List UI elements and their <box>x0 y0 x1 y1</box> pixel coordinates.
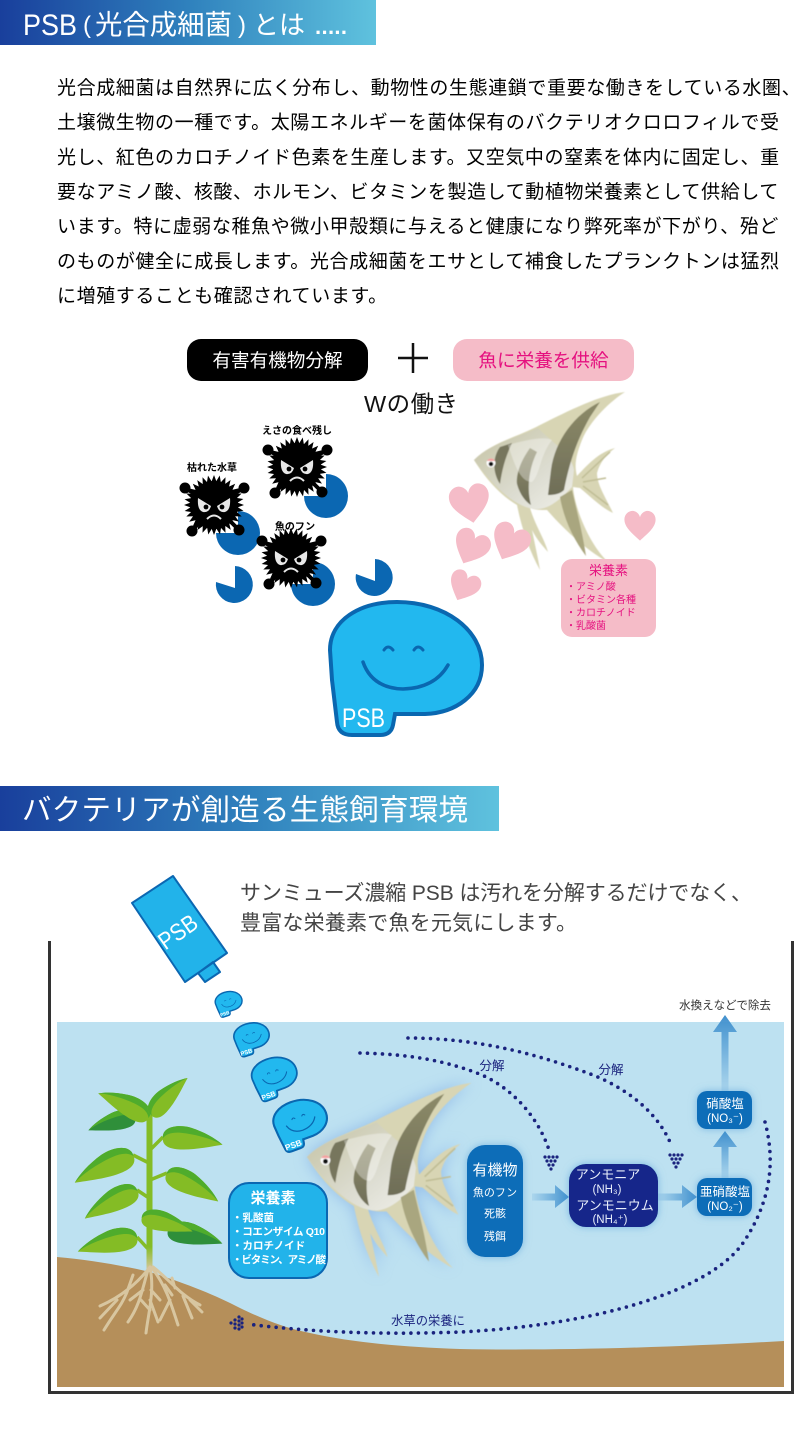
plant roots <box>100 1267 202 1333</box>
dotted arrow: decomposition to ammonia 1 <box>360 1053 559 1171</box>
pacman eating germ: 枯れた水草 <box>179 461 260 555</box>
panel: blue nutrients box: ・カロチノイド <box>232 1240 305 1252</box>
small PSB bacterium 2: PSB <box>240 1048 254 1058</box>
panel: aquarium water <box>57 1022 784 1387</box>
heading: バクテリアが創造る生態飼育環境 <box>0 786 499 831</box>
icon: PSB bottle: PSB <box>153 909 203 956</box>
illustration: angelfish in tank <box>307 1083 472 1277</box>
small PSB bacterium 4 <box>268 1092 334 1154</box>
heading: PSB とは: ( <box>83 12 91 39</box>
panel: pink nutrients box: ・ビタミン各種 <box>566 593 636 606</box>
heading: Wの働き: Wの働き <box>364 391 458 417</box>
panel: pink nutrients box: 栄養素 <box>589 563 628 578</box>
pacman eating germ: 魚のフン <box>256 520 335 606</box>
pacman eating germ: えさの食べ残し <box>262 424 348 518</box>
character: PSB smiling bacterium <box>330 602 482 735</box>
node: 有機物: 残餌 <box>484 1229 506 1243</box>
small PSB bacterium 4: PSB <box>284 1137 303 1153</box>
small PSB bacterium 1 <box>213 988 245 1018</box>
label: 分解 left: 分解 <box>479 1059 505 1073</box>
heading: PSB とは: 光合成細菌 <box>95 9 232 40</box>
node: アンモニア <box>569 1164 658 1227</box>
panel: blue nutrients box <box>229 1183 327 1278</box>
small PSB bacterium 1: PSB <box>220 1010 231 1018</box>
label: 水草の栄養に: 水草の栄養に <box>391 1313 465 1328</box>
node: 硝酸塩 <box>697 1091 752 1129</box>
node: 亜硝酸塩: (NO₂⁻) <box>707 1201 743 1213</box>
heading: PSB とは: ..... <box>315 14 347 39</box>
text block: PSB description: います。特に虚弱な稚魚や微小甲殻類に与えると健康になり弊死率が下がり、殆ど <box>57 216 779 238</box>
pacman eating germ: 魚のフン: 魚のフン <box>275 520 315 533</box>
text block: intro sentence: 豊富な栄養素で魚を元気にします。 <box>240 912 577 935</box>
panel: aquarium soil <box>57 1257 784 1387</box>
node: アンモニア: アンモニア <box>576 1167 640 1182</box>
icon: blue pacman left <box>216 566 253 603</box>
icon: PSB bottle <box>132 876 227 982</box>
panel: pink nutrients box: ・カロチノイド <box>566 607 636 619</box>
small PSB bacterium 2 <box>231 1018 274 1058</box>
node: アンモニア: (NH₄⁺) <box>592 1214 628 1226</box>
heading: バクテリアが創造る生態飼育環境: バクテリアが創造る生態飼育環境 <box>22 794 468 827</box>
text block: PSB description: 土壌微生物の一種です。太陽エネルギーを菌体保有のバクテリオクロロフィルで受 <box>57 112 780 134</box>
character: PSB smiling bacterium: PSB <box>342 703 385 733</box>
text block: PSB description: のものが健全に成長します。光合成細菌をエサとして補食したプランクトンは猛烈 <box>57 250 780 272</box>
illustration: water plant <box>68 1069 225 1333</box>
arrow: nitrate to water change <box>713 1015 737 1091</box>
pill: 魚に栄養を供給 <box>453 339 634 381</box>
text block: intro sentence <box>240 882 752 935</box>
icon: plus sign <box>398 343 428 373</box>
node: 硝酸塩: (NO₃⁻) <box>707 1113 743 1125</box>
node: 有機物 <box>467 1145 523 1257</box>
heading: PSB とは <box>0 0 376 45</box>
heading: PSB とは: PSB <box>23 9 77 42</box>
arrow: ammonia to nitrite <box>658 1185 697 1208</box>
panel: pink nutrients box: ・乳酸菌 <box>566 619 606 632</box>
text block: PSB description: 要なアミノ酸、核酸、ホルモン、ビタミンを製造して動植物栄養素として供給して <box>57 181 779 203</box>
pacman eating germ: えさの食べ残し: えさの食べ残し <box>262 424 332 437</box>
panel: pink nutrients box <box>561 559 656 637</box>
node: 亜硝酸塩: 亜硝酸塩 <box>700 1184 750 1199</box>
heading: PSB とは: ) <box>238 12 246 39</box>
node: 硝酸塩: 硝酸塩 <box>706 1096 744 1111</box>
node: 有機物: 有機物 <box>472 1162 518 1179</box>
panel: pink nutrients box: ・アミノ酸 <box>566 580 616 593</box>
dotted arrow: decomposition to ammonia 2 <box>408 1038 684 1169</box>
dotted arrow: nutrients back to plant <box>229 1122 770 1333</box>
text block: PSB description: に増殖することも確認されています。 <box>57 285 388 307</box>
node: アンモニア: アンモニウム <box>576 1198 654 1213</box>
panel: blue nutrients box: ・ビタミン、アミノ酸 <box>232 1253 326 1266</box>
panel: blue nutrients box: ・乳酸菌 <box>232 1211 274 1224</box>
icon: blue pacman right <box>356 559 393 596</box>
pacman eating germ: 枯れた水草: 枯れた水草 <box>187 461 237 474</box>
label: 分解 right: 分解 <box>598 1063 624 1077</box>
pill: 有害有機物分解: 有害有機物分解 <box>212 350 343 371</box>
text block: PSB description: 光し、紅色のカロチノイド色素を生産します。又空気中の窒素を体内に固定し、重 <box>57 146 780 168</box>
small PSB bacterium 3: PSB <box>261 1090 277 1102</box>
illustration: angelfish <box>474 392 625 570</box>
node: 有機物: 死骸 <box>484 1207 506 1220</box>
arrow: nitrite to nitrate <box>713 1131 737 1178</box>
aquarium tank frame <box>50 941 792 1392</box>
text block: PSB description <box>57 77 800 307</box>
pill: 有害有機物分解 <box>187 339 368 381</box>
text block: PSB description: 光合成細菌は自然界に広く分布し、動物性の生態連鎖で重要な働きをしている水圏、 <box>57 77 800 99</box>
pill: 魚に栄養を供給: 魚に栄養を供給 <box>478 350 609 371</box>
heading: PSB とは: とは <box>253 10 305 40</box>
node: 亜硝酸塩 <box>697 1178 752 1216</box>
node: 有機物: 魚のフン <box>473 1186 517 1199</box>
node: アンモニア: (NH₃) <box>593 1184 622 1196</box>
panel: blue nutrients box: 栄養素 <box>250 1189 296 1207</box>
text block: intro sentence: サンミューズ濃縮 PSB は汚れを分解するだけでなく、 <box>240 882 752 905</box>
icons: pink hearts <box>443 482 656 607</box>
label: 水換えなどで除去: 水換えなどで除去 <box>679 998 771 1012</box>
small PSB bacterium 3 <box>248 1051 303 1103</box>
panel: blue nutrients box: ・コエンザイム Q10 <box>232 1226 325 1238</box>
arrow: organic matter to ammonia <box>532 1185 569 1208</box>
